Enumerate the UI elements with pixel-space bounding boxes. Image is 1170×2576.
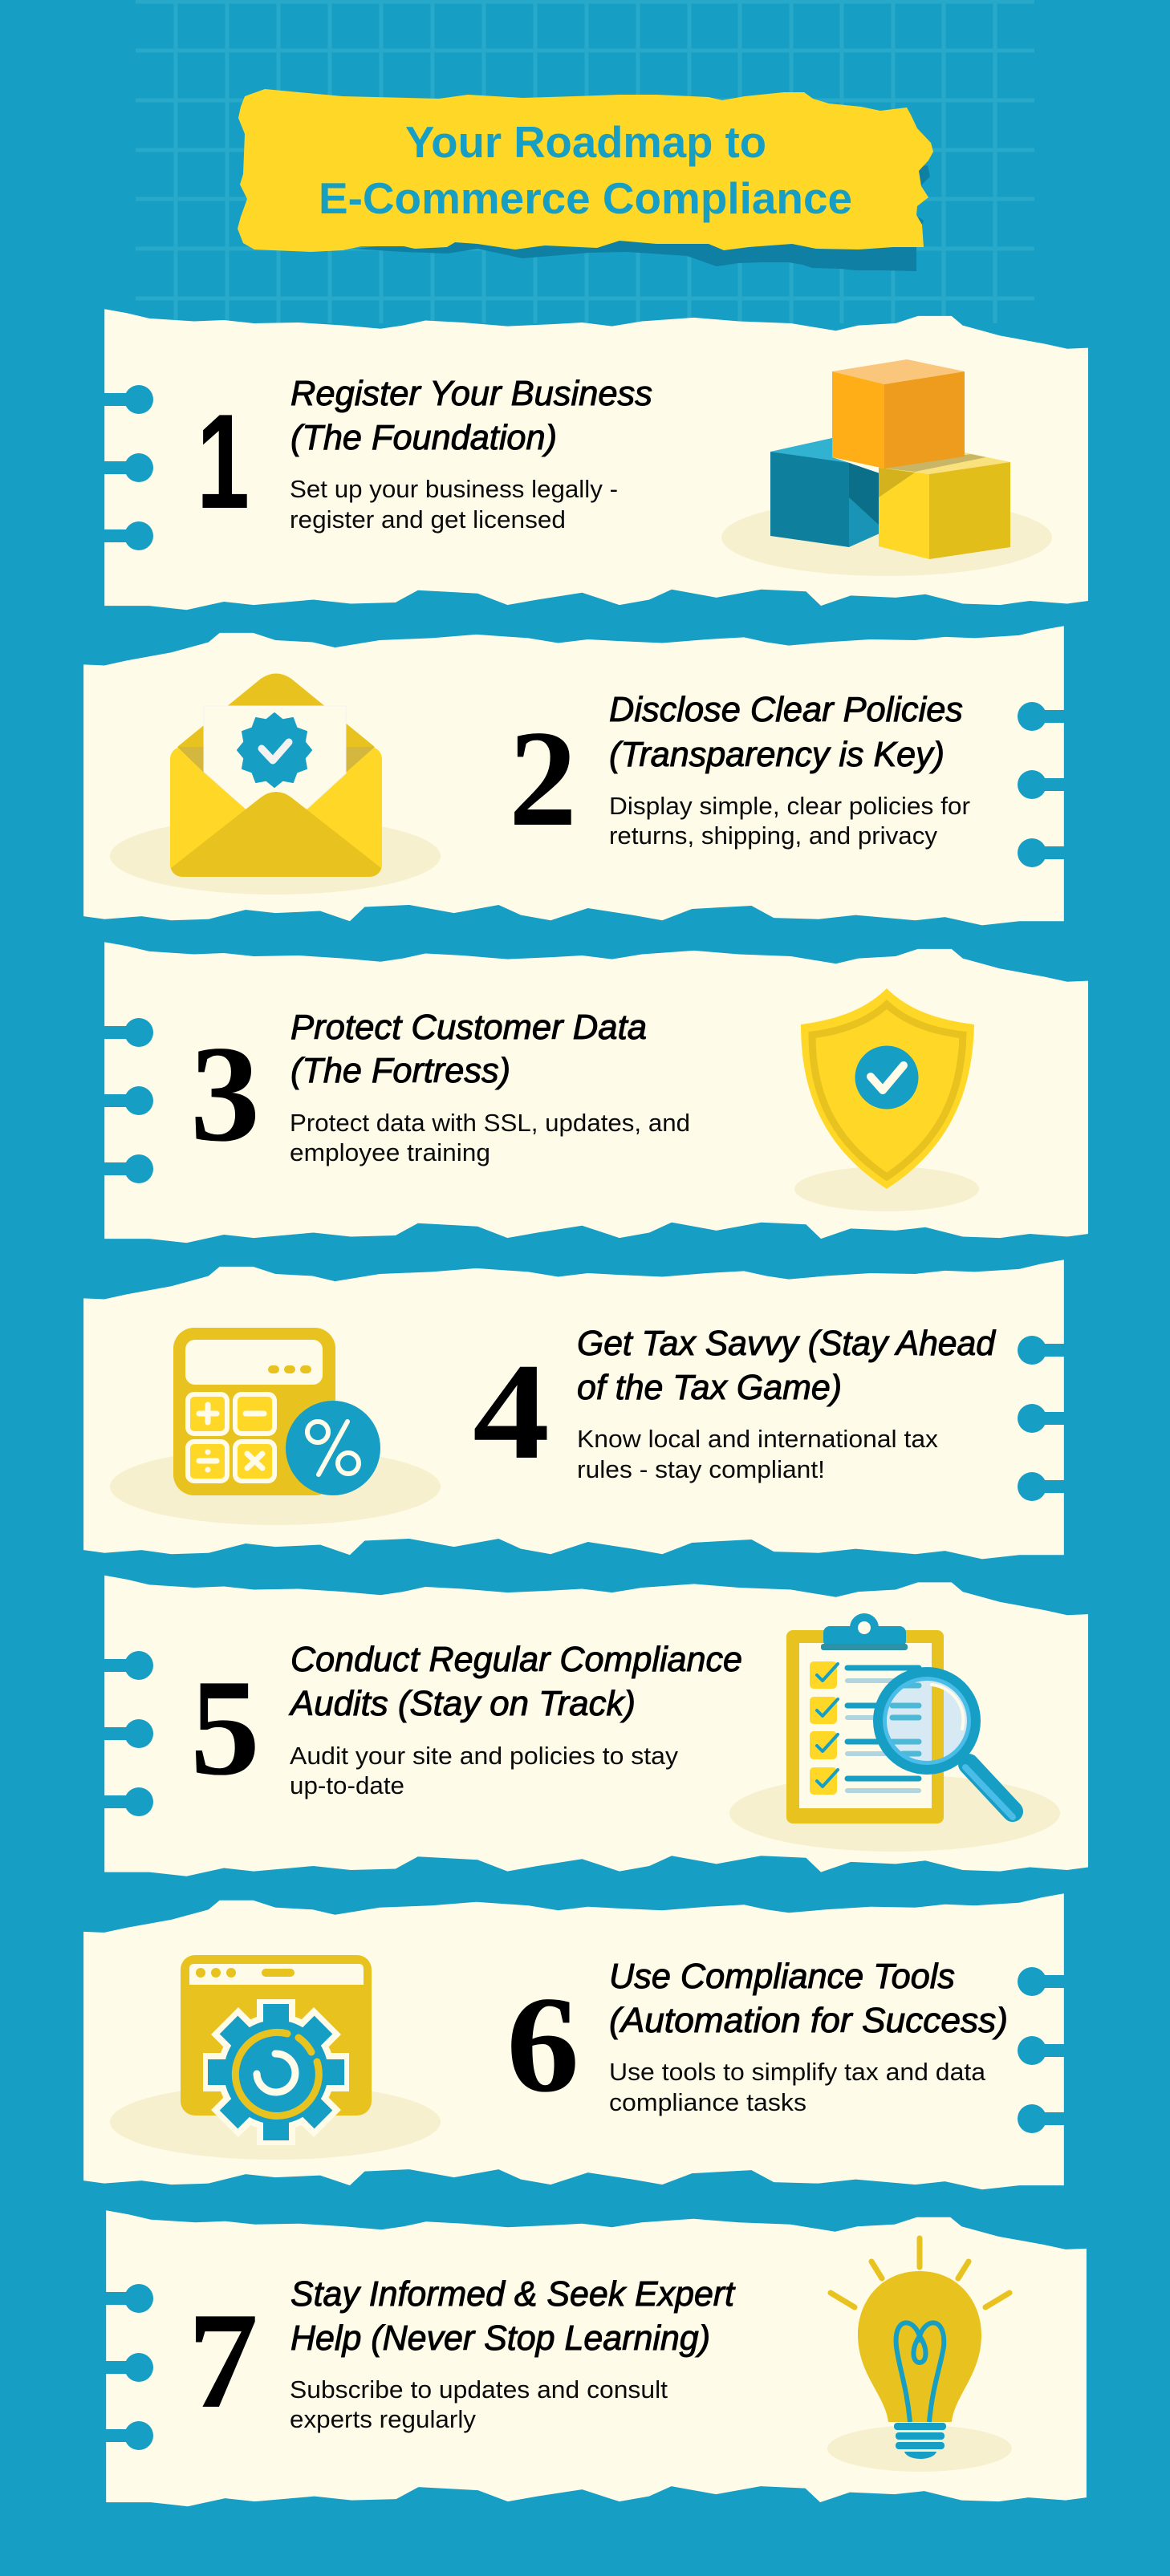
number 2: 2 [509,703,577,855]
heading: Protect Customer Data [290,1008,647,1047]
description [290,475,618,533]
panel: step 2 [83,626,1064,925]
title banner [238,89,933,271]
heading: Audits (Stay on Track) [288,1684,636,1723]
icon: shield [794,988,979,1211]
paper card [83,626,1064,925]
icon: envelope [110,674,441,895]
binder tabs [104,385,153,550]
description: experts regularly [290,2405,477,2433]
heading: of the Tax Game) [577,1368,842,1407]
grid pattern [136,0,1034,323]
heading [290,2274,736,2358]
description: compliance tasks [609,2088,806,2116]
description [609,792,970,850]
badge [238,713,311,787]
binder tabs [104,1018,153,1183]
description: Use tools to simplify tax and data [609,2058,986,2086]
description: returns, shipping, and privacy [609,821,938,850]
gear [203,1999,349,2145]
icon: stacked boxes [721,359,1052,576]
panel: step 7 [106,2210,1087,2506]
number 4: 4 [473,1336,550,1488]
heading: (The Fortress) [290,1051,510,1090]
description [577,1425,939,1483]
banner paper [238,89,933,252]
paper card [83,1260,1064,1559]
panel: step 1 [104,309,1088,610]
number 5: 5 [190,1652,260,1804]
paper card [104,942,1088,1243]
binder tabs [1018,1967,1064,2133]
heading [577,1324,996,1407]
panel: step 3 [104,942,1088,1243]
icon: light bulb [827,2238,1012,2472]
icon: calculator [110,1328,441,1525]
heading [609,1957,1008,2040]
panel: step 5 [104,1576,1088,1876]
binder tabs [106,2284,153,2450]
description: up-to-date [290,1771,404,1799]
binder tabs [104,1651,153,1816]
heading: (Automation for Success) [609,2001,1008,2040]
paper card [104,309,1088,610]
heading: (Transparency is Key) [609,735,945,774]
heading [290,1008,647,1090]
title text: E-Commerce Compliance [319,173,852,223]
paper card [104,1576,1088,1876]
heading: (The Foundation) [290,418,557,457]
number 6: 6 [506,1969,579,2121]
number 3: 3 [190,1018,260,1170]
number 7: 7 [188,2285,258,2437]
icon: browser window with gear [110,1955,441,2160]
description: Know local and international tax [577,1425,939,1453]
magnifier [878,1672,1013,1817]
description: Set up your business legally - [290,475,618,503]
description: employee training [290,1138,490,1166]
description: Protect data with SSL, updates, and [290,1109,690,1137]
panel: step 6 [83,1893,1064,2189]
description: rules - stay compliant! [577,1455,825,1483]
heading: Help (Never Stop Learning) [290,2318,710,2358]
heading: Stay Informed & Seek Expert [290,2274,736,2314]
description [290,1742,679,1799]
description: Display simple, clear policies for [609,792,970,820]
description [609,2058,986,2116]
icon: clipboard and magnifier [729,1613,1060,1852]
checklist [810,1661,837,1795]
description [290,1109,690,1166]
heading: Conduct Regular Compliance [290,1640,742,1679]
binder tabs [1018,1336,1064,1501]
description: Audit your site and policies to stay [290,1742,679,1770]
heading [290,374,652,457]
title text: Your Roadmap to [405,117,766,167]
description: Subscribe to updates and consult [290,2375,668,2404]
description: register and get licensed [290,505,566,533]
clip [821,1613,908,1650]
description [290,2375,668,2433]
panel: step 4 [83,1260,1064,1559]
number 1: 1 [197,386,250,537]
heading: Disclose Clear Policies [609,690,963,729]
banner shadow [353,165,930,271]
heading [288,1640,742,1723]
binder tabs [1018,702,1064,867]
title text [319,117,852,223]
heading: Use Compliance Tools [609,1957,955,1996]
heading: Get Tax Savvy (Stay Ahead [577,1324,996,1363]
heading: Register Your Business [290,374,652,413]
paper card [83,1893,1064,2189]
paper card [106,2210,1087,2506]
heading [609,690,963,774]
